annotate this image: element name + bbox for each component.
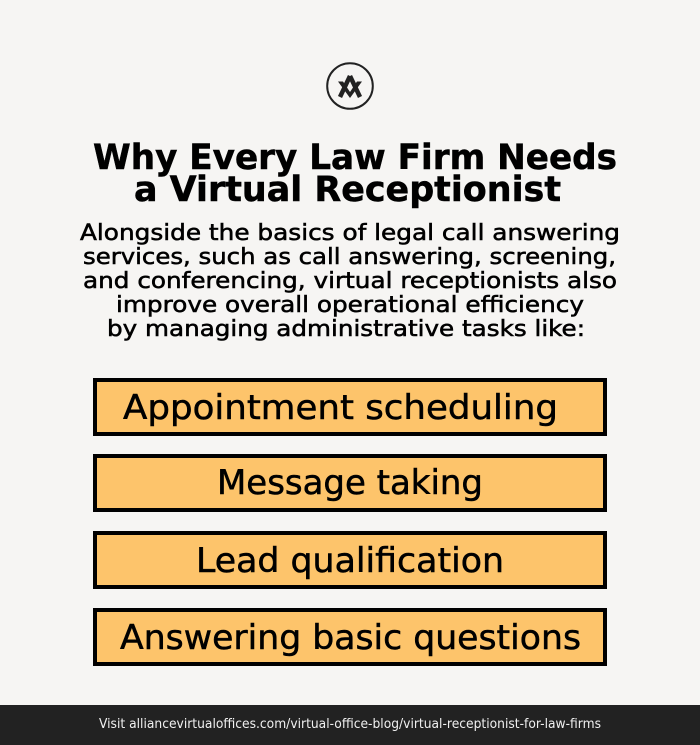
task box: message taking: Message taking [217, 463, 483, 503]
intro text [80, 220, 620, 342]
task box: lead qualification: Lead qualification [196, 541, 504, 581]
title: Why Every Law Firm Needs [93, 138, 617, 178]
task box: appointment scheduling: Appointment scheduling [123, 388, 558, 428]
intro text: and conferencing, virtual receptionists also [83, 268, 617, 294]
task box: message taking [95, 456, 605, 510]
intro text: improve overall operational efficiency [116, 292, 584, 318]
title [93, 138, 617, 210]
intro text: by managing administrative tasks like: [107, 316, 585, 342]
intro text: services, such as call answering, screening, [83, 244, 616, 270]
intro text: Alongside the basics of legal call answering [80, 220, 620, 246]
task box: answering basic questions [95, 610, 605, 664]
footer bar: Visit alliancevirtualoffices.com/virtual-office-blog/virtual-receptionist-for-law-firms [99, 717, 601, 732]
icon: logo [327, 63, 373, 109]
task box: lead qualification [95, 533, 605, 587]
footer bar [0, 705, 700, 745]
task box: appointment scheduling [95, 380, 605, 434]
task box: answering basic questions: Answering basic questions [120, 618, 581, 658]
title: a Virtual Receptionist [134, 170, 561, 210]
